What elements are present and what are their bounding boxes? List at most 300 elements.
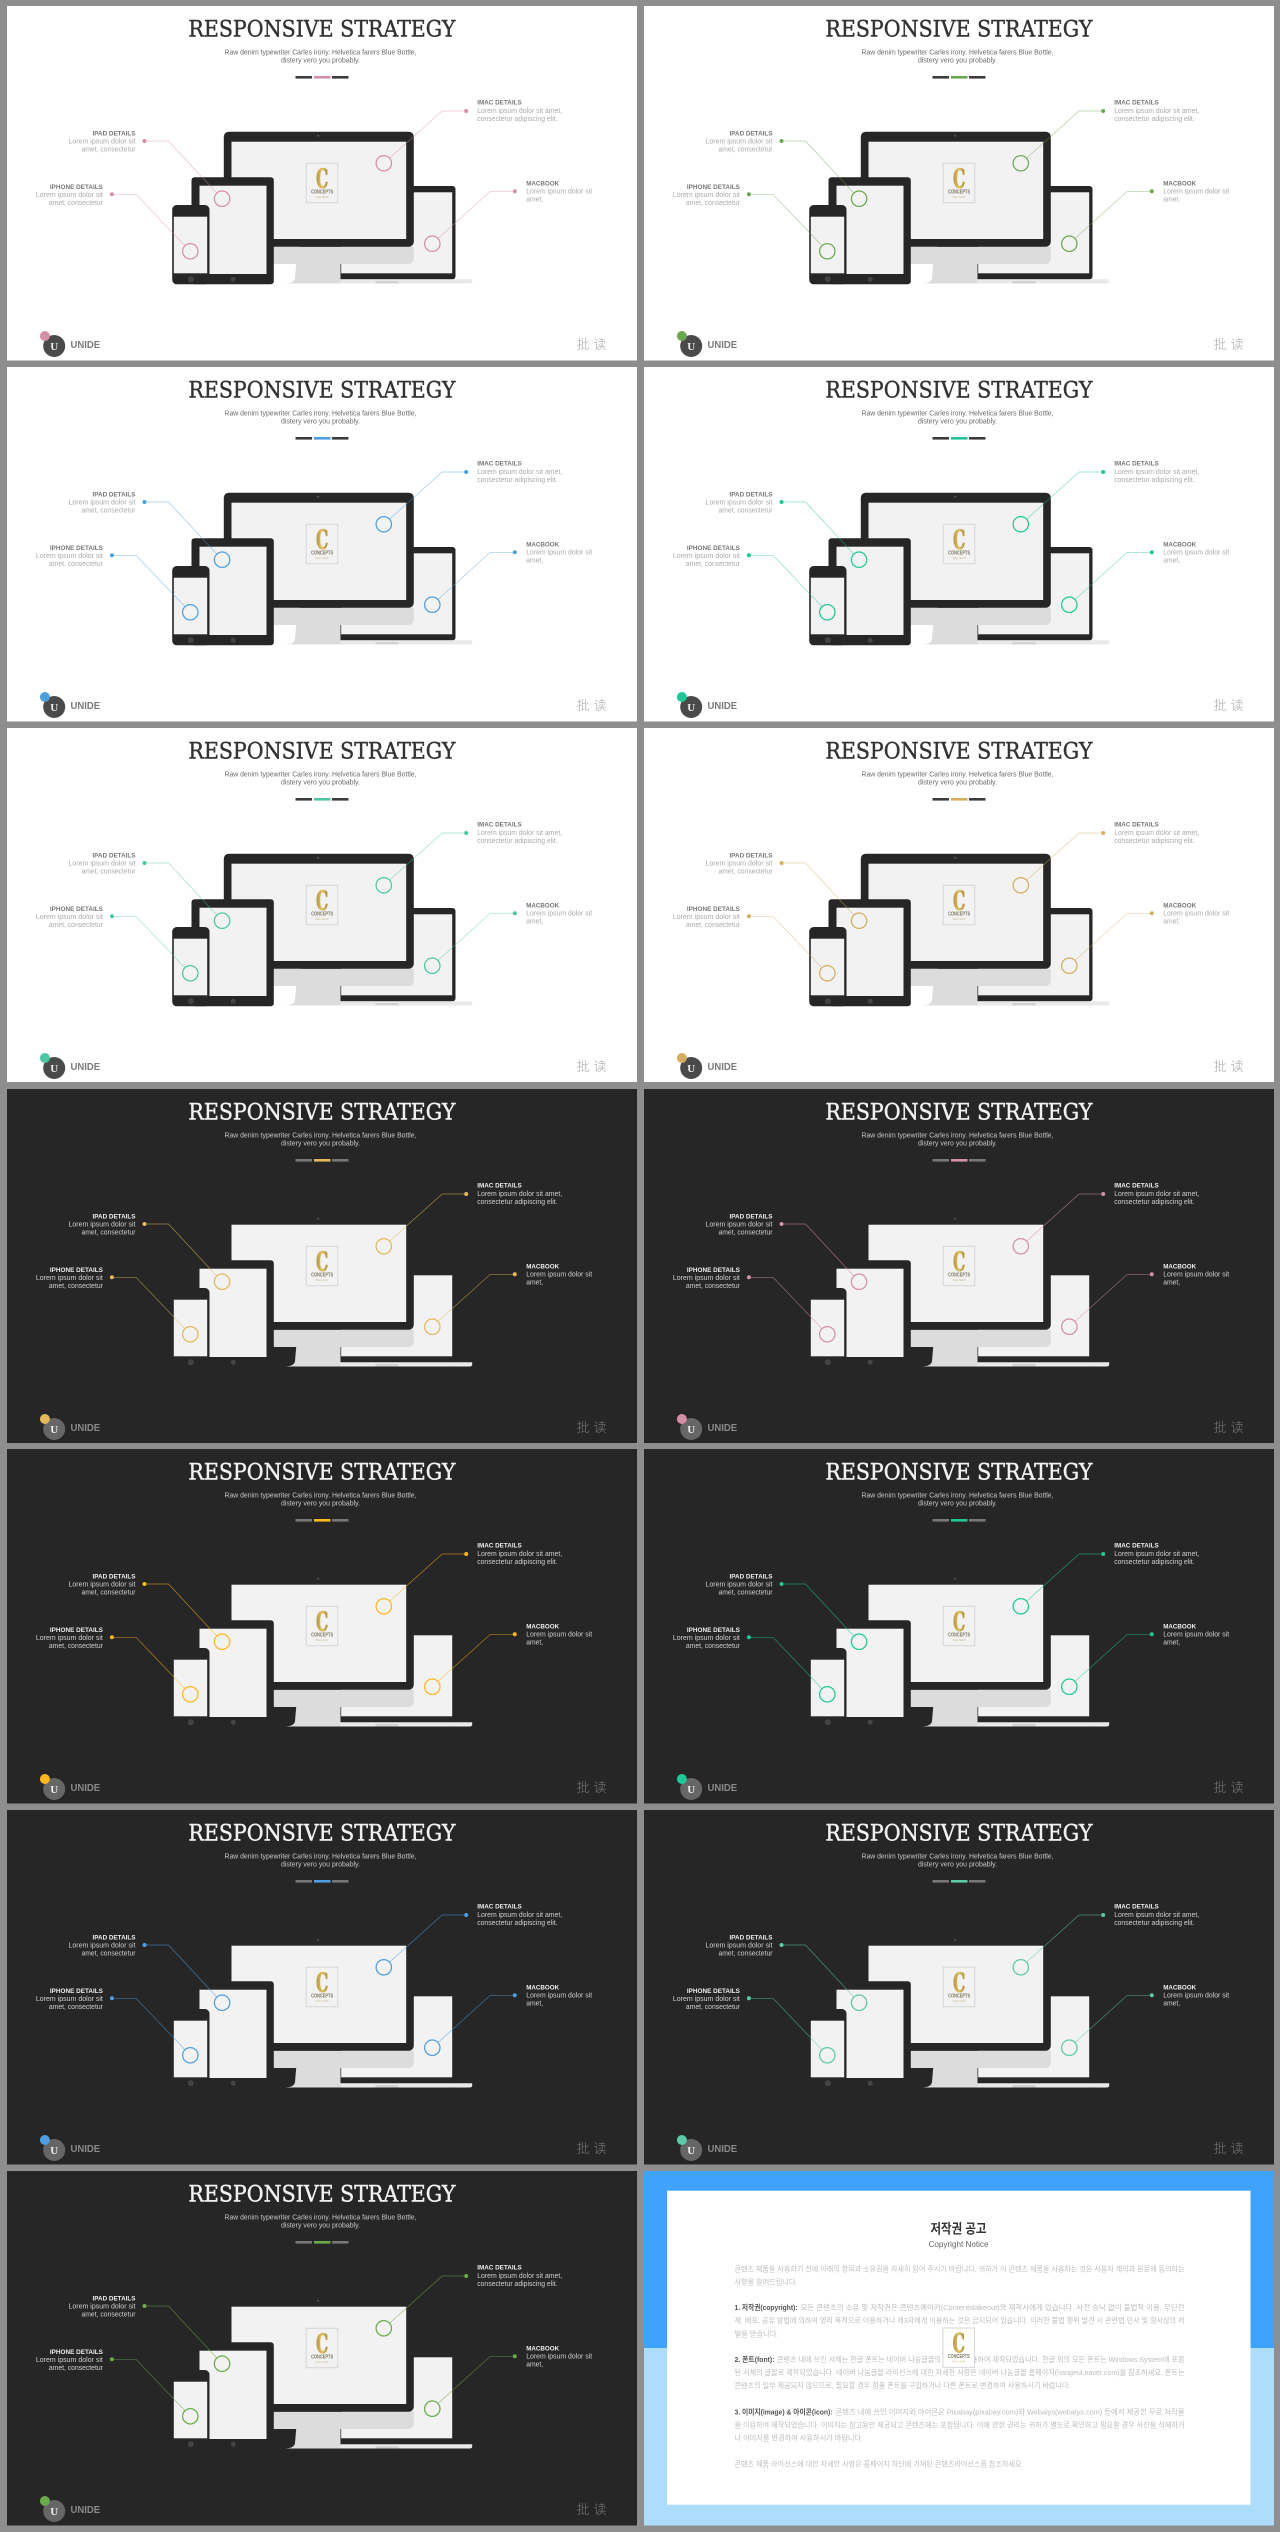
callout: MacBook: Lorem ipsum dolor sit [1163, 1993, 1229, 2000]
panel: slide 3 blue [7, 367, 637, 722]
devices illustration [172, 132, 472, 284]
footer glyphs: 批 读 [1213, 695, 1243, 714]
callout: iPhone: Lorem ipsum dolor sit [672, 1996, 739, 2003]
footer glyphs: 批 读 [576, 1777, 606, 1796]
panel: slide 7 dark gold [7, 1089, 637, 1443]
callout: iPad [705, 130, 866, 206]
panel: slide 6 gold [644, 728, 1274, 1082]
callout: MacBook: amet, [526, 1640, 543, 1647]
title: RESPONSIVE STRATEGY [188, 379, 455, 404]
callout: iMac: IMAC DETAILS [1114, 821, 1159, 828]
center logo: CONCEPTS [311, 911, 333, 917]
callout: iPad [68, 130, 229, 206]
panel: slide 8 dark pink [644, 1089, 1274, 1443]
brand logo [39, 2135, 100, 2161]
title: RESPONSIVE STRATEGY [188, 18, 455, 43]
panel: slide 2 green [644, 6, 1274, 360]
callout: MacBook: MACBOOK [526, 2346, 559, 2353]
center logo: CONCEPTS [948, 1632, 970, 1638]
center logo: C [953, 886, 965, 916]
callout: iPad: IPAD DETAILS [92, 1573, 136, 1580]
callout: iPhone: IPHONE DETAILS [49, 1266, 103, 1274]
callout: iPad: amet, consectetur [718, 868, 773, 875]
callout: iPhone: Lorem ipsum dolor sit [672, 1635, 739, 1642]
callout: iMac [1013, 100, 1199, 171]
subtitle: Raw denim typewriter Carles irony. Helvetica farers Blue Bottle, [224, 410, 416, 417]
callout: iPad: amet, consectetur [81, 1229, 136, 1236]
callout: iPhone: amet, consectetur [685, 2004, 740, 2011]
center logo [943, 885, 974, 924]
callout: iPhone [672, 906, 834, 980]
callout: iMac: Lorem ipsum dolor sit amet, [1114, 1551, 1199, 1558]
callout: MacBook [424, 542, 592, 612]
callout: iPad: Lorem ipsum dolor sit [68, 860, 135, 867]
callout: iMac [376, 1543, 562, 1614]
callout: iPad: amet, consectetur [81, 1589, 136, 1596]
callout: iPhone: amet, consectetur [48, 200, 103, 207]
panel: copyright notice [644, 2171, 1274, 2526]
subtitle: distery vero you probably. [280, 57, 360, 64]
center logo: C [953, 164, 965, 194]
callout: iPhone: IPHONE DETAILS [686, 1627, 740, 1634]
subtitle: distery vero you probably. [918, 1140, 997, 1147]
center logo: CONCEPTS [311, 1994, 333, 2000]
brand logo: U [687, 341, 695, 353]
brand logo: UNIDE [707, 2144, 737, 2155]
callout: MacBook: MACBOOK [1163, 1263, 1196, 1270]
brand logo: UNIDE [707, 1783, 737, 1794]
title: RESPONSIVE STRATEGY [188, 1100, 455, 1125]
callout: iPad: amet, consectetur [718, 1589, 773, 1596]
subtitle: distery vero you probably. [918, 418, 997, 425]
divider bars [932, 1519, 985, 1522]
callout: iMac: IMAC DETAILS [477, 821, 522, 828]
callout: iPhone: IPHONE DETAILS [49, 906, 103, 912]
callout: MacBook [1061, 181, 1229, 251]
panel: slide 11 dark blue [7, 1810, 637, 2164]
title: RESPONSIVE STRATEGY [188, 1461, 455, 1486]
callout: iPad: IPAD DETAILS [729, 1934, 773, 1941]
center logo: MALL SHOP [952, 1999, 965, 2003]
center logo: CONCEPTS [311, 1272, 333, 1278]
callout: iPhone: amet, consectetur [685, 1643, 740, 1650]
divider bars [295, 437, 348, 440]
center logo [943, 1246, 974, 1285]
section 2: font [734, 2355, 1184, 2390]
callout: MacBook: MACBOOK [1163, 902, 1196, 909]
subtitle: distery vero you probably. [280, 418, 360, 425]
section 3: image and icon: 콘텐츠 내에 쓰인 이미지와 아이콘은 Pixabay(pixabay.com)와 Webalys(webalys.com) 등에서 제공한 무료 저작물 [835, 2407, 1184, 2416]
callout: iMac: consectetur adipiscing elit. [1114, 1920, 1194, 1927]
callout: MacBook: Lorem ipsum dolor sit [526, 550, 592, 557]
callout: iPad: IPAD DETAILS [729, 130, 773, 137]
callout: iMac: consectetur adipiscing elit. [1114, 1198, 1194, 1206]
divider bars [932, 437, 985, 440]
brand logo: U [50, 1784, 58, 1796]
callout: iPad [705, 1934, 866, 2010]
subtitle: distery vero you probably. [918, 1500, 997, 1507]
callout: iPad: amet, consectetur [81, 1950, 136, 1957]
callout: MacBook: MACBOOK [1163, 1624, 1196, 1631]
callout: MacBook: MACBOOK [526, 1624, 559, 1631]
section 1: copyright [734, 2303, 1184, 2338]
center logo: C [316, 1608, 328, 1638]
callout: iPhone: amet, consectetur [48, 922, 103, 928]
callout: iPad: IPAD DETAILS [92, 491, 136, 498]
callout: iPhone: IPHONE DETAILS [686, 1988, 740, 1995]
brand logo [39, 1052, 100, 1078]
callout: MacBook: Lorem ipsum dolor sit [526, 910, 592, 917]
subtitle [861, 49, 1053, 64]
brand logo: U [687, 702, 695, 714]
background: blue top band [644, 2171, 1274, 2348]
brand logo: U [687, 2145, 695, 2157]
callout: MacBook [1061, 1985, 1229, 2055]
footer glyphs: 批 读 [1213, 334, 1243, 353]
callout: iMac: IMAC DETAILS [477, 1543, 522, 1550]
footer glyphs: 批 读 [1213, 1416, 1243, 1436]
brand logo: UNIDE [70, 701, 100, 712]
callout: MacBook: MACBOOK [1163, 1985, 1196, 1992]
callout: MacBook [424, 1985, 592, 2055]
brand logo [676, 692, 737, 718]
brand logo: UNIDE [707, 340, 737, 351]
callout: iPhone: amet, consectetur [48, 1282, 103, 1290]
callout: iPad [68, 1573, 229, 1649]
callout: iPad: Lorem ipsum dolor sit [705, 1581, 772, 1588]
devices illustration [809, 853, 1109, 1006]
brand logo: U [50, 2145, 58, 2157]
callout: iPad: Lorem ipsum dolor sit [68, 1581, 135, 1588]
center logo [943, 524, 974, 564]
callout: iPhone [35, 2349, 198, 2424]
callout: iPhone: Lorem ipsum dolor sit [672, 1274, 739, 1282]
brand logo: UNIDE [70, 2505, 100, 2516]
callout: iPhone: amet, consectetur [48, 561, 103, 568]
center logo: MALL SHOP [315, 1999, 328, 2003]
callout: MacBook: Lorem ipsum dolor sit [1163, 1632, 1229, 1639]
callout: iMac: consectetur adipiscing elit. [477, 1559, 557, 1566]
intro paragraph [734, 2264, 1184, 2287]
callout: MacBook [424, 181, 592, 251]
divider bars [932, 76, 985, 79]
callout: iPad: Lorem ipsum dolor sit [68, 138, 135, 145]
callout: iMac: IMAC DETAILS [477, 2265, 522, 2272]
center logo: MALL SHOP [315, 1278, 328, 1282]
callout: iPad: amet, consectetur [81, 146, 136, 153]
callout: iMac: Lorem ipsum dolor sit amet, [1114, 1912, 1199, 1919]
callout: iMac: IMAC DETAILS [1114, 1182, 1159, 1189]
callout: iPhone [35, 545, 198, 620]
section 2: font: 콘텐츠의 일부 제공되지 않으므로, 필요할 경우 정품 폰트를 구입하거나 다른 폰트로 변경하여 사용하시기 바랍니다. [734, 2381, 1070, 2390]
center logo [943, 1967, 974, 2007]
callout: iPad [705, 1573, 866, 1649]
panel: slide 5 mint [7, 728, 637, 1082]
title: RESPONSIVE STRATEGY [188, 739, 455, 764]
callout: iPad: IPAD DETAILS [92, 852, 136, 859]
callout: iMac: IMAC DETAILS [477, 461, 522, 468]
subtitle: Raw denim typewriter Carles irony. Helvetica farers Blue Bottle, [224, 2214, 416, 2221]
callout: iPhone: Lorem ipsum dolor sit [35, 1274, 102, 1282]
subtitle [224, 1853, 416, 1868]
panel: slide 9 dark yellow [7, 1449, 637, 1804]
callout: iPhone: IPHONE DETAILS [49, 2349, 103, 2356]
callout: iMac: Lorem ipsum dolor sit amet, [477, 108, 562, 115]
center logo: MALL SHOP [315, 1638, 328, 1642]
section 3: image and icon: 3. 이미지(image) & 아이콘(icon): [734, 2407, 832, 2416]
callout: iPad: amet, consectetur [718, 146, 773, 153]
subtitle: distery vero you probably. [280, 1861, 360, 1868]
title: RESPONSIVE STRATEGY [825, 1461, 1092, 1486]
footer glyphs: 批 读 [1213, 1056, 1243, 1074]
brand logo: U [687, 1062, 695, 1074]
callout: iPhone [35, 1988, 198, 2063]
footer glyphs: 批 读 [576, 2499, 606, 2518]
center logo: C [952, 2329, 964, 2359]
subtitle: distery vero you probably. [918, 57, 997, 64]
callout: iPhone [35, 1266, 198, 1342]
callout: MacBook [1061, 1263, 1229, 1334]
callout: iPhone: IPHONE DETAILS [49, 545, 103, 552]
callout: iMac [1013, 821, 1199, 892]
callout: iMac [1013, 1543, 1199, 1614]
callout: iPhone: IPHONE DETAILS [49, 184, 103, 191]
callout: iPhone: amet, consectetur [48, 2004, 103, 2011]
callout: iMac: Lorem ipsum dolor sit amet, [477, 469, 562, 476]
callout: iMac: IMAC DETAILS [477, 1182, 522, 1189]
callout: iMac: IMAC DETAILS [1114, 461, 1159, 468]
callout: MacBook: MACBOOK [1163, 181, 1196, 188]
brand logo [39, 331, 100, 357]
brand logo [676, 1414, 737, 1440]
callout: iPhone: amet, consectetur [48, 2365, 103, 2372]
brand logo [39, 1774, 100, 1800]
section 1: copyright: 모든 콘텐츠의 소유 및 저작권은 콘텐츠메이커(Contentstakeout)와 제작사에게 있습니다. 사전 승낙 없이 불법적 이용, 무단전 [800, 2303, 1184, 2312]
subtitle: distery vero you probably. [280, 779, 360, 786]
center logo: CONCEPTS [948, 1994, 970, 2000]
subtitle: Raw denim typewriter Carles irony. Helvetica farers Blue Bottle, [861, 49, 1053, 56]
brand logo: UNIDE [70, 2144, 100, 2155]
callout: iPhone: IPHONE DETAILS [686, 1266, 740, 1274]
callout: iPad: Lorem ipsum dolor sit [705, 138, 772, 145]
intro paragraph: 콘텐츠 제품을 사용하기 전에 아래의 항목과 소유권을 자세히 읽어 주시기 바랍니다. 귀하가 이 콘텐츠 제품을 사용하는 것은 사용자 계약과 본문에 동의하는 [734, 2264, 1184, 2273]
callout: iMac: consectetur adipiscing elit. [1114, 477, 1194, 484]
callout: iPad [68, 852, 229, 928]
callout: iPad: Lorem ipsum dolor sit [68, 1942, 135, 1949]
callout: iPhone: amet, consectetur [48, 1643, 103, 1650]
callout: iMac [1013, 1904, 1199, 1975]
callout: iPhone: amet, consectetur [685, 1282, 740, 1290]
callout: iMac [376, 821, 562, 892]
callout: iPhone: IPHONE DETAILS [686, 906, 740, 912]
devices illustration [809, 1575, 1109, 1727]
subtitle [224, 49, 416, 64]
callout: iMac: consectetur adipiscing elit. [477, 116, 557, 123]
callout: iPad: IPAD DETAILS [729, 1573, 773, 1580]
center logo: C [953, 1968, 965, 1998]
brand logo: UNIDE [707, 1062, 737, 1072]
brand logo: U [50, 1424, 58, 1436]
divider bars [932, 1880, 985, 1883]
callout: iPad: amet, consectetur [718, 1950, 773, 1957]
callout: iPhone: Lorem ipsum dolor sit [35, 1996, 102, 2003]
callout: iPhone: amet, consectetur [685, 922, 740, 928]
center logo [942, 2328, 974, 2367]
callout: iMac: Lorem ipsum dolor sit amet, [477, 1912, 562, 1919]
center logo: C [316, 164, 328, 194]
section 1: copyright: 1. 저작권(copyright): [734, 2303, 797, 2312]
callout: MacBook: Lorem ipsum dolor sit [1163, 550, 1229, 557]
callout: iPhone: Lorem ipsum dolor sit [672, 914, 739, 920]
callout: iPhone [672, 184, 834, 259]
callout: iPad: amet, consectetur [718, 507, 773, 514]
center logo: C [316, 886, 328, 916]
section 2: font: 2. 폰트(font): [734, 2355, 774, 2364]
callout: MacBook: MACBOOK [1163, 542, 1196, 549]
center logo: CONCEPTS [311, 190, 333, 196]
divider bars [295, 1519, 348, 1522]
callout: iPad [68, 1213, 229, 1289]
brand logo [39, 692, 100, 718]
callout: MacBook: amet, [1163, 2001, 1180, 2008]
brand logo: UNIDE [70, 340, 100, 351]
subtitle: Raw denim typewriter Carles irony. Helvetica farers Blue Bottle, [861, 1853, 1053, 1860]
callout: iPad: Lorem ipsum dolor sit [705, 1942, 772, 1949]
center logo: CONCEPTS [311, 550, 333, 556]
callout: iMac: IMAC DETAILS [1114, 1543, 1159, 1550]
center logo: C [316, 526, 328, 556]
callout: iMac [1013, 1182, 1199, 1254]
panel: slide 12 dark mint [644, 1810, 1274, 2164]
callout: MacBook: amet, [526, 2001, 543, 2008]
panel: slide 1 pink [7, 6, 637, 360]
center logo: CONCEPTS [311, 1632, 333, 1638]
divider bars [295, 76, 348, 79]
callout: MacBook: amet, [526, 918, 543, 925]
devices illustration [172, 493, 472, 645]
brand logo: UNIDE [70, 1062, 100, 1072]
center logo: MALL SHOP [952, 1638, 965, 1642]
callout: iPad [705, 852, 866, 928]
title: RESPONSIVE STRATEGY [825, 739, 1092, 764]
center logo: CONCEPTS [948, 550, 970, 556]
callout: MacBook [1061, 542, 1229, 612]
devices illustration [172, 1214, 472, 1367]
callout: MacBook: Lorem ipsum dolor sit [1163, 910, 1229, 917]
callout: MacBook: amet, [1163, 918, 1180, 925]
section 3: image and icon: 을 이용하여 제작되었습니다. 이미지는 참고용만 제공되고 콘텐츠에는 포함됩니다. 이에 관한 권리는 귀하가 별도로 확인하고 필요할 경우 사진을 삭제하거 [734, 2420, 1184, 2429]
brand logo [676, 1052, 737, 1078]
callout: iPad: IPAD DETAILS [729, 852, 773, 859]
subtitle: Raw denim typewriter Carles irony. Helvetica farers Blue Bottle, [224, 1853, 416, 1860]
callout: iPad: Lorem ipsum dolor sit [705, 860, 772, 867]
brand logo: UNIDE [70, 1783, 100, 1794]
subtitle [224, 1132, 416, 1147]
callout: iPad: Lorem ipsum dolor sit [705, 499, 772, 506]
center logo: CONCEPTS [948, 911, 970, 917]
callout: iMac: IMAC DETAILS [477, 1904, 522, 1911]
center logo [943, 163, 974, 203]
panel: slide 4 teal [644, 367, 1274, 722]
center logo [306, 1246, 337, 1285]
center logo: C [316, 2330, 328, 2360]
callout: MacBook [424, 2346, 592, 2416]
center logo: MALL SHOP [952, 556, 965, 560]
title: RESPONSIVE STRATEGY [825, 1822, 1092, 1847]
callout: MacBook: Lorem ipsum dolor sit [526, 1993, 592, 2000]
callout: MacBook: Lorem ipsum dolor sit [526, 1271, 592, 1278]
callout: MacBook: amet, [526, 2362, 543, 2369]
center logo: MALL SHOP [952, 195, 965, 199]
callout: iPhone: IPHONE DETAILS [49, 1988, 103, 1995]
callout: iPhone: IPHONE DETAILS [686, 545, 740, 552]
divider bars [932, 798, 985, 800]
callout: MacBook: amet, [1163, 1279, 1180, 1286]
callout: iMac: Lorem ipsum dolor sit amet, [477, 1551, 562, 1558]
callout: iMac [376, 1182, 562, 1254]
brand logo [39, 2496, 100, 2522]
copyright heading: 저작권 공고 [930, 2222, 986, 2236]
center logo [306, 524, 337, 564]
callout: iPad: IPAD DETAILS [92, 2295, 136, 2302]
brand logo: U [687, 1424, 695, 1436]
callout: iMac [376, 2265, 562, 2336]
callout: iPad: IPAD DETAILS [729, 491, 773, 498]
center logo [306, 2328, 337, 2368]
brand logo: UNIDE [707, 1422, 737, 1434]
center logo: C [316, 1247, 328, 1277]
section 2: font: 콘텐츠 내에 쓰인 서체는 한글 폰트는 네이버 나눔글꼴의 서체를 이용하여 제작되었습니다. 한글 외의 모든 폰트는 Windows System에 포함 [776, 2355, 1184, 2364]
center logo: C [316, 1968, 328, 1998]
callout: iPhone: Lorem ipsum dolor sit [672, 192, 739, 199]
divider bars [295, 1158, 348, 1161]
center logo: CONCEPTS [948, 190, 970, 196]
subtitle [861, 1492, 1053, 1507]
callout: iPhone [672, 1627, 834, 1702]
callout: iPad: Lorem ipsum dolor sit [68, 1221, 135, 1228]
center logo: MALL SHOP [315, 2360, 328, 2364]
divider bars [295, 2241, 348, 2244]
callout: iPad: Lorem ipsum dolor sit [705, 1221, 772, 1228]
brand logo: UNIDE [70, 1422, 100, 1434]
callout: iPad [68, 1934, 229, 2010]
footer glyphs: 批 读 [1213, 2138, 1243, 2157]
center logo: MALL SHOP [315, 556, 328, 560]
callout: iMac: IMAC DETAILS [1114, 1904, 1159, 1911]
callout: iPhone [35, 184, 198, 259]
callout: iMac: Lorem ipsum dolor sit amet, [1114, 469, 1199, 476]
center logo: MALL SHOP [952, 916, 965, 920]
closing note: 콘텐츠 제품 라이선스에 대한 자세한 사항은 홈페이지 하단에 기재된 콘텐츠라이선스를 참조하세요. [734, 2459, 1023, 2468]
callout: iPad: IPAD DETAILS [729, 1213, 773, 1220]
callout: iMac: IMAC DETAILS [477, 100, 522, 107]
brand logo [676, 2135, 737, 2161]
footer glyphs: 批 读 [576, 2138, 606, 2157]
callout: iPhone [672, 1988, 834, 2063]
callout: iMac: Lorem ipsum dolor sit amet, [1114, 1190, 1199, 1198]
title: RESPONSIVE STRATEGY [188, 1822, 455, 1847]
callout: MacBook [424, 1624, 592, 1694]
callout: MacBook: MACBOOK [526, 181, 559, 188]
devices illustration [172, 1936, 472, 2088]
brand logo: UNIDE [707, 701, 737, 712]
callout: MacBook: amet, [526, 1279, 543, 1286]
center logo [943, 1606, 974, 1646]
subtitle: Raw denim typewriter Carles irony. Helvetica farers Blue Bottle, [861, 410, 1053, 417]
callout: iMac: consectetur adipiscing elit. [477, 1198, 557, 1206]
callout: MacBook: Lorem ipsum dolor sit [1163, 189, 1229, 196]
callout: iPad [68, 491, 229, 567]
